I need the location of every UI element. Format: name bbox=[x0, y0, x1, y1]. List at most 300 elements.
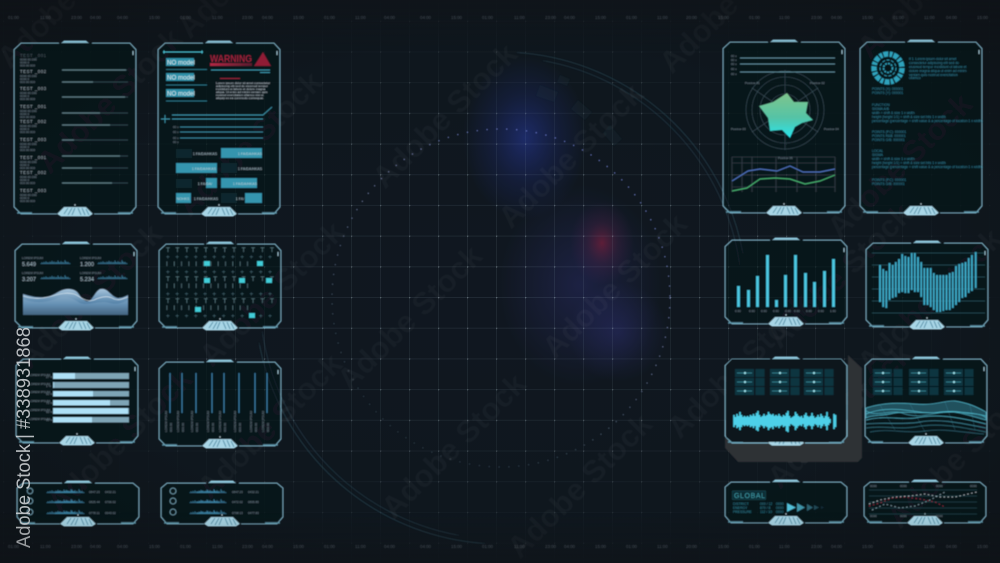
list detail lines: 0000.00.000 bbox=[20, 109, 37, 113]
bottom time scale: 23:00 bbox=[545, 544, 557, 549]
code lines: POINTS R&B: 000001 bbox=[872, 134, 906, 138]
row numbers: 0432.21 bbox=[248, 490, 259, 494]
bar labels: 0.00 bbox=[806, 309, 812, 313]
chart axis labels: 0000 bbox=[970, 484, 977, 488]
top time scale: 15:00 bbox=[977, 15, 989, 20]
data buttons: NOHKS bbox=[177, 197, 190, 201]
chart axis labels: 0000 bbox=[870, 514, 877, 518]
panel: sliders and mesh bbox=[865, 356, 987, 446]
bottom time scale: 01:00 bbox=[749, 544, 761, 549]
chart axis labels bbox=[870, 484, 977, 518]
bottom time scale: 11:00 bbox=[40, 544, 51, 549]
model buttons: NO model bbox=[167, 60, 195, 66]
panel: waveform rows centre bbox=[161, 480, 283, 526]
top time scale: 11:00 bbox=[40, 15, 51, 20]
symbol rows: IIIIIIIIIIII bbox=[166, 305, 254, 312]
list detail lines: 0000.00.000 bbox=[20, 175, 37, 179]
top time scale: 11:00 bbox=[779, 15, 790, 20]
rotated labels: LOREM IPSUM bbox=[164, 410, 168, 432]
stat numbers: 5.234 bbox=[80, 277, 94, 283]
rotated labels: 000.00 bbox=[266, 422, 270, 432]
bar labels: 99 % bbox=[46, 410, 53, 414]
panel: warning bbox=[158, 40, 280, 216]
stat numbers: 1.200 bbox=[80, 262, 94, 268]
bottom time scale: 11:00 bbox=[779, 544, 790, 549]
bar labels: 0.00 bbox=[794, 309, 800, 313]
bottom time scale: 01:00 bbox=[180, 544, 192, 549]
list labels: TEST _001 bbox=[20, 104, 47, 109]
bottom time scale: 15:00 bbox=[718, 544, 730, 549]
dotted circle bbox=[332, 129, 670, 467]
bar labels: LOREM IPSUM bbox=[29, 382, 51, 386]
list detail lines: 0000.0 bbox=[20, 163, 30, 167]
rotated labels: LOREM IPSUM bbox=[218, 410, 222, 432]
bottom time scale: 11:00 bbox=[355, 544, 366, 549]
top lines bbox=[731, 54, 835, 76]
intro text: veniam quis nostrud exercitation bbox=[909, 73, 958, 77]
watermarks: Adobe Stock bbox=[365, 36, 524, 195]
top lines: 00 x bbox=[731, 58, 737, 62]
code lines: POINTS G/B: 000001 bbox=[872, 182, 905, 186]
data buttons bbox=[176, 148, 263, 203]
code lines: percentage (percentage = shift value & a percentage of location 1 x width) bbox=[872, 119, 983, 123]
list labels: TEST _003 bbox=[20, 86, 47, 91]
top time scale: 04:00 bbox=[946, 15, 958, 20]
list detail lines: 000.00.000 bbox=[20, 181, 35, 185]
top time scale bbox=[8, 15, 989, 20]
rotated labels: LOREM IPSUM bbox=[233, 410, 237, 432]
top time scale: 04:00 bbox=[117, 15, 129, 20]
watermarks: Adobe Stock bbox=[535, 206, 694, 365]
bottom time scale: 15:00 bbox=[862, 544, 874, 549]
bar labels: 0.00 bbox=[773, 309, 779, 313]
bottom time scale: 15:00 bbox=[149, 544, 161, 549]
row numbers: 0805.85 bbox=[248, 500, 259, 504]
bottom time scale: 15:00 bbox=[595, 544, 607, 549]
data buttons: 1 FA/DA/HKAS bbox=[192, 167, 217, 171]
list detail lines: 0000.0 bbox=[20, 94, 30, 98]
model buttons: NO model bbox=[167, 90, 195, 98]
audio waveform bbox=[734, 411, 836, 432]
rotated labels: 000.00 bbox=[211, 422, 215, 432]
watermarks: Adobe Stock bbox=[660, 286, 819, 445]
code lines: LOCAL bbox=[872, 149, 883, 153]
top lines: 00 x bbox=[731, 62, 737, 66]
bottom time scale: 01:00 bbox=[8, 544, 20, 549]
list detail lines: 000.00.000 bbox=[20, 97, 35, 101]
bar labels: 1.00 bbox=[830, 309, 836, 313]
top time scale: 11:00 bbox=[924, 15, 935, 20]
panel: test list bbox=[14, 40, 136, 216]
top time scale: 15:00 bbox=[862, 15, 874, 20]
row waves bbox=[47, 489, 84, 514]
list detail lines: 0000.00.000 bbox=[20, 193, 37, 197]
list detail lines: 0000.0 bbox=[20, 127, 30, 131]
bottom time scale: 04:00 bbox=[384, 544, 396, 549]
row numbers: 0847.23 bbox=[232, 490, 243, 494]
global details: 0000 bbox=[776, 506, 784, 510]
rotated labels: 000.00 bbox=[223, 422, 227, 432]
watermarks: Adobe Stock bbox=[500, 406, 659, 563]
row numbers: 0472.02 bbox=[232, 500, 243, 504]
bottom time scale: 04:00 bbox=[420, 544, 432, 549]
data buttons: 1 FA/ bbox=[236, 197, 244, 201]
code lines: POINTS G/B: 000001 bbox=[872, 138, 905, 142]
row circles bbox=[27, 488, 33, 515]
top time scale: 04:00 bbox=[831, 15, 843, 20]
row waves bbox=[190, 489, 226, 514]
list labels: TEST _001 bbox=[20, 155, 47, 160]
top time scale: 11:00 bbox=[212, 15, 223, 20]
code lines: FUNCTION bbox=[872, 103, 890, 107]
row numbers: 0706.02 bbox=[105, 500, 116, 504]
rotated labels: LOREM IPSUM bbox=[176, 410, 180, 432]
list detail lines: 0000.00.000 bbox=[20, 91, 37, 95]
list detail lines: 000.00.000 bbox=[20, 130, 35, 134]
top time scale: 15:00 bbox=[595, 15, 607, 20]
mini bars bbox=[41, 260, 127, 279]
list detail lines: 000.00.000 bbox=[20, 64, 35, 68]
gridlines bbox=[872, 253, 985, 313]
bottom time scale bbox=[8, 544, 989, 549]
stat numbers: LOREM IPSUM bbox=[22, 271, 44, 275]
faint tech sectors upper right bbox=[536, 75, 622, 146]
panel: sliders and waveform bbox=[725, 356, 847, 446]
panel: waveform rows left bbox=[17, 480, 139, 526]
top time scale: 01:00 bbox=[324, 15, 336, 20]
top time scale: 01:00 bbox=[180, 15, 192, 20]
warning text block: adipiscing elit sed do eiusmod tempor bbox=[216, 84, 268, 88]
range bars bbox=[880, 252, 976, 312]
global details: PRESSURE bbox=[733, 510, 752, 514]
bar labels: LOREM IPSUM bbox=[29, 417, 51, 421]
rotated labels bbox=[164, 410, 270, 432]
row numbers: 0943.02 bbox=[105, 511, 116, 515]
top time scale: 15:00 bbox=[451, 15, 463, 20]
bottom time scale: 01:00 bbox=[482, 544, 494, 549]
blue glow top bbox=[463, 56, 587, 220]
bottom time scale: 15:00 bbox=[451, 544, 463, 549]
list detail lines: 0000.00.000 bbox=[20, 160, 37, 164]
bottom time scale: 04:00 bbox=[262, 544, 274, 549]
panel: vertical lines bbox=[159, 360, 281, 448]
bottom time scale: 04:00 bbox=[831, 544, 843, 549]
code lines: width = shift & size 1 x width bbox=[872, 157, 915, 161]
small lines: 00 x bbox=[173, 140, 179, 144]
list detail lines: 0000.0 bbox=[20, 60, 30, 64]
watermarks: Adobe Stock bbox=[820, 86, 979, 245]
watermarks: Adobe Stock bbox=[170, 64, 329, 223]
list labels bbox=[20, 53, 47, 193]
list detail lines: 000.00.000 bbox=[20, 166, 35, 170]
intro text: consectetur adipiscing elit sed do bbox=[909, 61, 959, 65]
bottom time scale: 15:00 bbox=[293, 544, 305, 549]
stat numbers: 3.207 bbox=[22, 277, 36, 283]
list labels: TEST _001 bbox=[20, 53, 47, 58]
bar labels: 0.00 bbox=[761, 309, 767, 313]
model buttons bbox=[166, 58, 207, 101]
vertical stock credit: Adobe Stock | #338931868 bbox=[14, 327, 35, 548]
list detail lines: 000.00.000 bbox=[20, 148, 35, 152]
code lines: POINTS (Y): 000001 bbox=[872, 91, 903, 95]
area chart bbox=[23, 289, 128, 315]
list detail lines: 0000.00.000 bbox=[20, 124, 37, 128]
top lines: 00 x bbox=[731, 72, 737, 76]
symbol rows: ++++++++++++ bbox=[166, 254, 277, 261]
top time scale: 04:00 bbox=[420, 15, 432, 20]
radar labels: Positive 03 bbox=[731, 127, 746, 131]
bar labels bbox=[29, 373, 53, 422]
list labels: TEST _002 bbox=[20, 69, 47, 74]
radar labels: Positive 04 bbox=[824, 127, 839, 131]
radar star bbox=[759, 93, 813, 138]
list labels: TEST _003 bbox=[20, 188, 47, 193]
purple glow middle bbox=[498, 185, 662, 385]
top time scale: 04:00 bbox=[564, 15, 576, 20]
top time scale: 01:00 bbox=[8, 15, 20, 20]
bars bbox=[737, 255, 835, 307]
global details: 0000 bbox=[776, 502, 784, 506]
bottom time scale: 11:00 bbox=[514, 544, 525, 549]
shadow block behind panel bbox=[725, 355, 862, 462]
warning text block: incididunt ut labore et dolore magna bbox=[216, 87, 265, 91]
panel: multi-line chart bbox=[864, 480, 986, 526]
slider grid bbox=[735, 369, 834, 395]
warning heading: WARNING bbox=[210, 53, 252, 65]
top time scale: 15:00 bbox=[149, 15, 161, 20]
blue glow lower right bbox=[568, 282, 668, 382]
wave mesh bbox=[866, 401, 986, 434]
stat numbers: LOREM IPSUM bbox=[22, 256, 44, 260]
bar labels: 50 % bbox=[46, 418, 53, 422]
list detail lines: 0000.0 bbox=[20, 178, 30, 182]
row numbers: 0778.11 bbox=[89, 511, 100, 515]
data buttons: 1 FA/DA/HKAS bbox=[238, 167, 263, 171]
bar labels: 1 % bbox=[46, 384, 52, 388]
watermarks: Adobe Stock bbox=[30, 21, 189, 180]
global details: 112 / 10 bbox=[760, 510, 772, 514]
vertical bars bbox=[170, 373, 267, 413]
small lines bbox=[173, 125, 263, 144]
rotated labels: 000.00 bbox=[169, 422, 173, 432]
bottom time scale: 01:00 bbox=[626, 544, 638, 549]
chart axis labels: 0000 bbox=[900, 484, 907, 488]
small lines: 00 x bbox=[173, 136, 179, 140]
rotated labels: LOREM IPSUM bbox=[206, 410, 210, 432]
bar values bbox=[53, 373, 128, 422]
bar labels: 50 % bbox=[46, 392, 53, 396]
row numbers bbox=[89, 490, 116, 515]
rotated labels: 000.00 bbox=[181, 422, 185, 432]
rotated labels: LOREM IPSUM bbox=[190, 410, 194, 432]
arrow line bbox=[163, 50, 203, 54]
intro text: if 1. Lorem ipsum dolor sit amet bbox=[909, 57, 956, 61]
bottom time scale: 11:00 bbox=[657, 544, 668, 549]
symbol rows: IIIIIIIIIIII bbox=[166, 261, 254, 268]
warning rule bbox=[211, 70, 270, 72]
intro text: dolore magna aliqua ut enim ad minim bbox=[909, 69, 967, 73]
bar labels: LOREM IPSUM bbox=[29, 390, 51, 394]
top time scale: 15:00 bbox=[293, 15, 305, 20]
bar labels: 27 % bbox=[46, 375, 53, 379]
bottom time scale: 01:00 bbox=[893, 544, 905, 549]
watermarks: Adobe Stock bbox=[190, 346, 349, 505]
rotated labels: LOREM IPSUM bbox=[249, 410, 253, 432]
chart axis labels: 0000 bbox=[900, 514, 907, 518]
list detail lines: 0000.0 bbox=[20, 145, 30, 149]
top time scale: 01:00 bbox=[893, 15, 905, 20]
bottom time scale: 23:00 bbox=[811, 544, 823, 549]
bottom time scale: 01:00 bbox=[324, 544, 336, 549]
top time scale: 01:00 bbox=[749, 15, 761, 20]
bar tracks bbox=[53, 373, 129, 422]
global details bbox=[733, 502, 784, 514]
list labels: TEST _002 bbox=[20, 119, 47, 124]
icon: warning triangle bbox=[254, 52, 271, 66]
top time scale: 04:00 bbox=[90, 15, 102, 20]
code lines: percentage (percentage = shift value & a percentage of location 1 x width) bbox=[872, 165, 983, 169]
row numbers: 0708.13 bbox=[232, 511, 243, 515]
list labels: TEST _003 bbox=[20, 137, 47, 142]
bar labels: LOREM IPSUM bbox=[29, 399, 51, 403]
watermarks: Adobe Stock bbox=[40, 361, 199, 520]
symbol rows bbox=[166, 247, 279, 320]
watermarks: Adobe Stock bbox=[491, 76, 650, 235]
intro text: eiusmod tempor incididunt ut labore et bbox=[909, 65, 967, 69]
warning bar bbox=[210, 63, 252, 66]
top time scale: 20:00 bbox=[686, 15, 698, 20]
bottom time scale: 04:00 bbox=[564, 544, 576, 549]
symbol rows: ++++++++++++ bbox=[166, 313, 277, 320]
data buttons: 1 FA/DA/ bbox=[198, 182, 212, 186]
watermarks: Adobe Stock bbox=[760, 196, 919, 355]
top time scale: 01:00 bbox=[482, 15, 494, 20]
watermarks: Adobe Stock bbox=[10, 216, 169, 375]
global details: 000 / 12 bbox=[760, 502, 772, 506]
stat numbers: LOREM IPSUM bbox=[80, 271, 102, 275]
radar labels: Positive 02 bbox=[810, 81, 825, 85]
chart lines bbox=[869, 492, 977, 510]
code lines: POINTS (P.C): 000001 bbox=[872, 178, 906, 182]
rotated labels: LOREM IPSUM bbox=[261, 410, 265, 432]
top time scale: 11:00 bbox=[657, 15, 668, 20]
global details: 0000 bbox=[776, 510, 784, 514]
bar labels: 0.00 bbox=[818, 309, 824, 313]
bar labels bbox=[735, 309, 836, 313]
small lines: 00 x bbox=[173, 125, 179, 129]
highlighted cells bbox=[195, 261, 272, 318]
panel: bar chart bbox=[725, 238, 847, 326]
opaque panel backing bbox=[726, 359, 846, 442]
symbol rows: TTTTTTTTTTTT bbox=[166, 247, 279, 254]
global title: GLOBAL bbox=[734, 493, 766, 500]
bar labels: 75 % bbox=[46, 401, 53, 405]
bar labels: 0.00 bbox=[735, 309, 741, 313]
symbol rows: ++++++++++++ bbox=[166, 291, 277, 298]
symbol rows: IIIIIIIIIIII bbox=[166, 283, 254, 290]
bar labels: 0.00 bbox=[749, 309, 755, 313]
top time scale: 11:00 bbox=[514, 15, 525, 20]
bar labels: LOREM IPSUM bbox=[29, 373, 51, 377]
chart axis labels: 0000 bbox=[870, 484, 877, 488]
bottom time scale: 23:00 bbox=[71, 544, 83, 549]
list detail lines: 0000.00.000 bbox=[20, 58, 37, 62]
symbol rows: TTTTTTTTTTTT bbox=[166, 298, 279, 305]
top time scale: 04:00 bbox=[384, 15, 396, 20]
top time scale: 15:00 bbox=[718, 15, 730, 20]
stat numbers: 5.649 bbox=[22, 262, 36, 268]
rotated labels: 000.00 bbox=[254, 422, 258, 432]
stat numbers bbox=[22, 256, 102, 283]
top time scale: 23:00 bbox=[242, 15, 254, 20]
line chart bbox=[732, 156, 835, 192]
code lines: POINTS (P.C): 000001 bbox=[872, 130, 906, 134]
model buttons: NO model bbox=[167, 74, 195, 82]
top lines: 00 x bbox=[731, 67, 737, 71]
radar rings bbox=[746, 70, 824, 150]
symbol rows: TTTTTTTTTTTT bbox=[166, 276, 279, 283]
red glow bbox=[570, 201, 634, 285]
chart axis labels: 0000 bbox=[936, 484, 943, 488]
watermarks: Adobe Stock bbox=[192, 214, 351, 373]
radar labels bbox=[731, 81, 839, 131]
list detail lines: 0000.00.000 bbox=[20, 142, 37, 146]
panel: symbol matrix bbox=[159, 242, 281, 330]
top time scale: 11:00 bbox=[355, 15, 366, 20]
warning text block: aliquip ex ea commodo consequat. bbox=[216, 96, 264, 100]
panel: radar chart bbox=[723, 40, 845, 216]
watermarks: Adobe Stock bbox=[760, 336, 919, 495]
row numbers bbox=[232, 490, 259, 515]
list detail lines: 000.00.000 bbox=[20, 199, 35, 203]
data buttons: 1 FA/DA/HKAS bbox=[194, 197, 219, 201]
code lines: height (height 1/1) = shift & size set bits 1 x width bbox=[872, 161, 946, 165]
bottom time scale: 04:00 bbox=[946, 544, 958, 549]
watermarks: Adobe Stock bbox=[374, 366, 533, 525]
code lines: height (height 1/1) = shift & size set bits 1 x width bbox=[872, 115, 946, 119]
line chart: Positive 05 bbox=[778, 156, 793, 160]
icon: cyan data wheel bbox=[874, 54, 902, 82]
bottom time scale: 15:00 bbox=[977, 544, 989, 549]
stat numbers: LOREM IPSUM bbox=[80, 256, 102, 260]
progress lines bbox=[62, 70, 128, 183]
code lines: POINTS (X): 000001 bbox=[872, 87, 903, 91]
data buttons: 1 FA/DA/HKAS bbox=[193, 152, 218, 156]
warning text block: nostrud exercitation ullamco nisi ut bbox=[216, 93, 264, 97]
list detail lines: 0000.0 bbox=[20, 112, 30, 116]
bar labels: LOREM IPSUM bbox=[29, 408, 51, 412]
outer ring bbox=[222, 19, 780, 563]
row numbers: 0825.44 bbox=[89, 500, 100, 504]
symbol rows: ++++++++++++ bbox=[166, 269, 277, 276]
top time scale: 23:00 bbox=[71, 15, 83, 20]
code lines: width = shift & size 1 x width bbox=[872, 111, 915, 115]
cross and long lines bbox=[161, 107, 272, 123]
list detail lines: 000.00.000 bbox=[20, 80, 35, 84]
data buttons: 1 FA/DA/HKAS bbox=[238, 152, 263, 156]
code lines: SIGMA bbox=[872, 153, 884, 157]
list detail lines: 0000.0 bbox=[20, 196, 30, 200]
bar labels: 0.00 bbox=[785, 309, 791, 313]
list detail lines bbox=[20, 58, 37, 203]
bottom time scale: 04:00 bbox=[117, 544, 129, 549]
panel: global bbox=[725, 480, 847, 526]
bottom time scale: 11:00 bbox=[212, 544, 223, 549]
rotated labels: 000.00 bbox=[238, 422, 242, 432]
top time scale: 01:00 bbox=[626, 15, 638, 20]
panel: range bars bbox=[866, 240, 988, 330]
warning text block bbox=[216, 78, 270, 100]
